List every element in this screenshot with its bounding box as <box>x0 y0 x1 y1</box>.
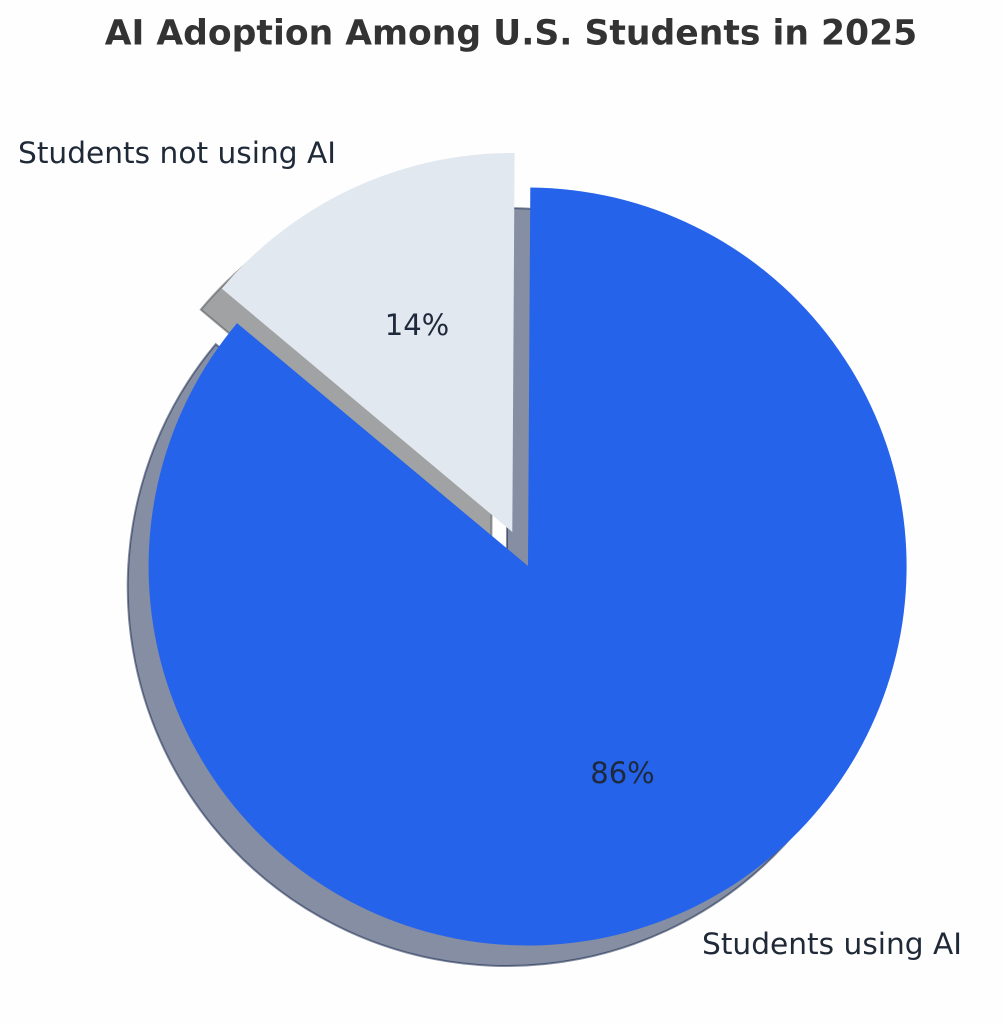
label: students not using AI: Students not using AI <box>18 135 336 170</box>
shadow: students not using AI wedge <box>201 174 494 553</box>
title: AI Adoption Among U.S. Students in 2025 <box>105 14 917 54</box>
pie chart <box>128 153 907 966</box>
wedge: students not using AI 14% (exploded) <box>222 153 515 532</box>
shadow: students using AI wedge <box>128 208 886 966</box>
percent: 86%: 86% <box>590 756 655 790</box>
percent: 14%: 14% <box>385 308 449 342</box>
wedge: students using AI 86% <box>149 188 907 945</box>
label: students using AI: Students using AI <box>702 926 962 961</box>
